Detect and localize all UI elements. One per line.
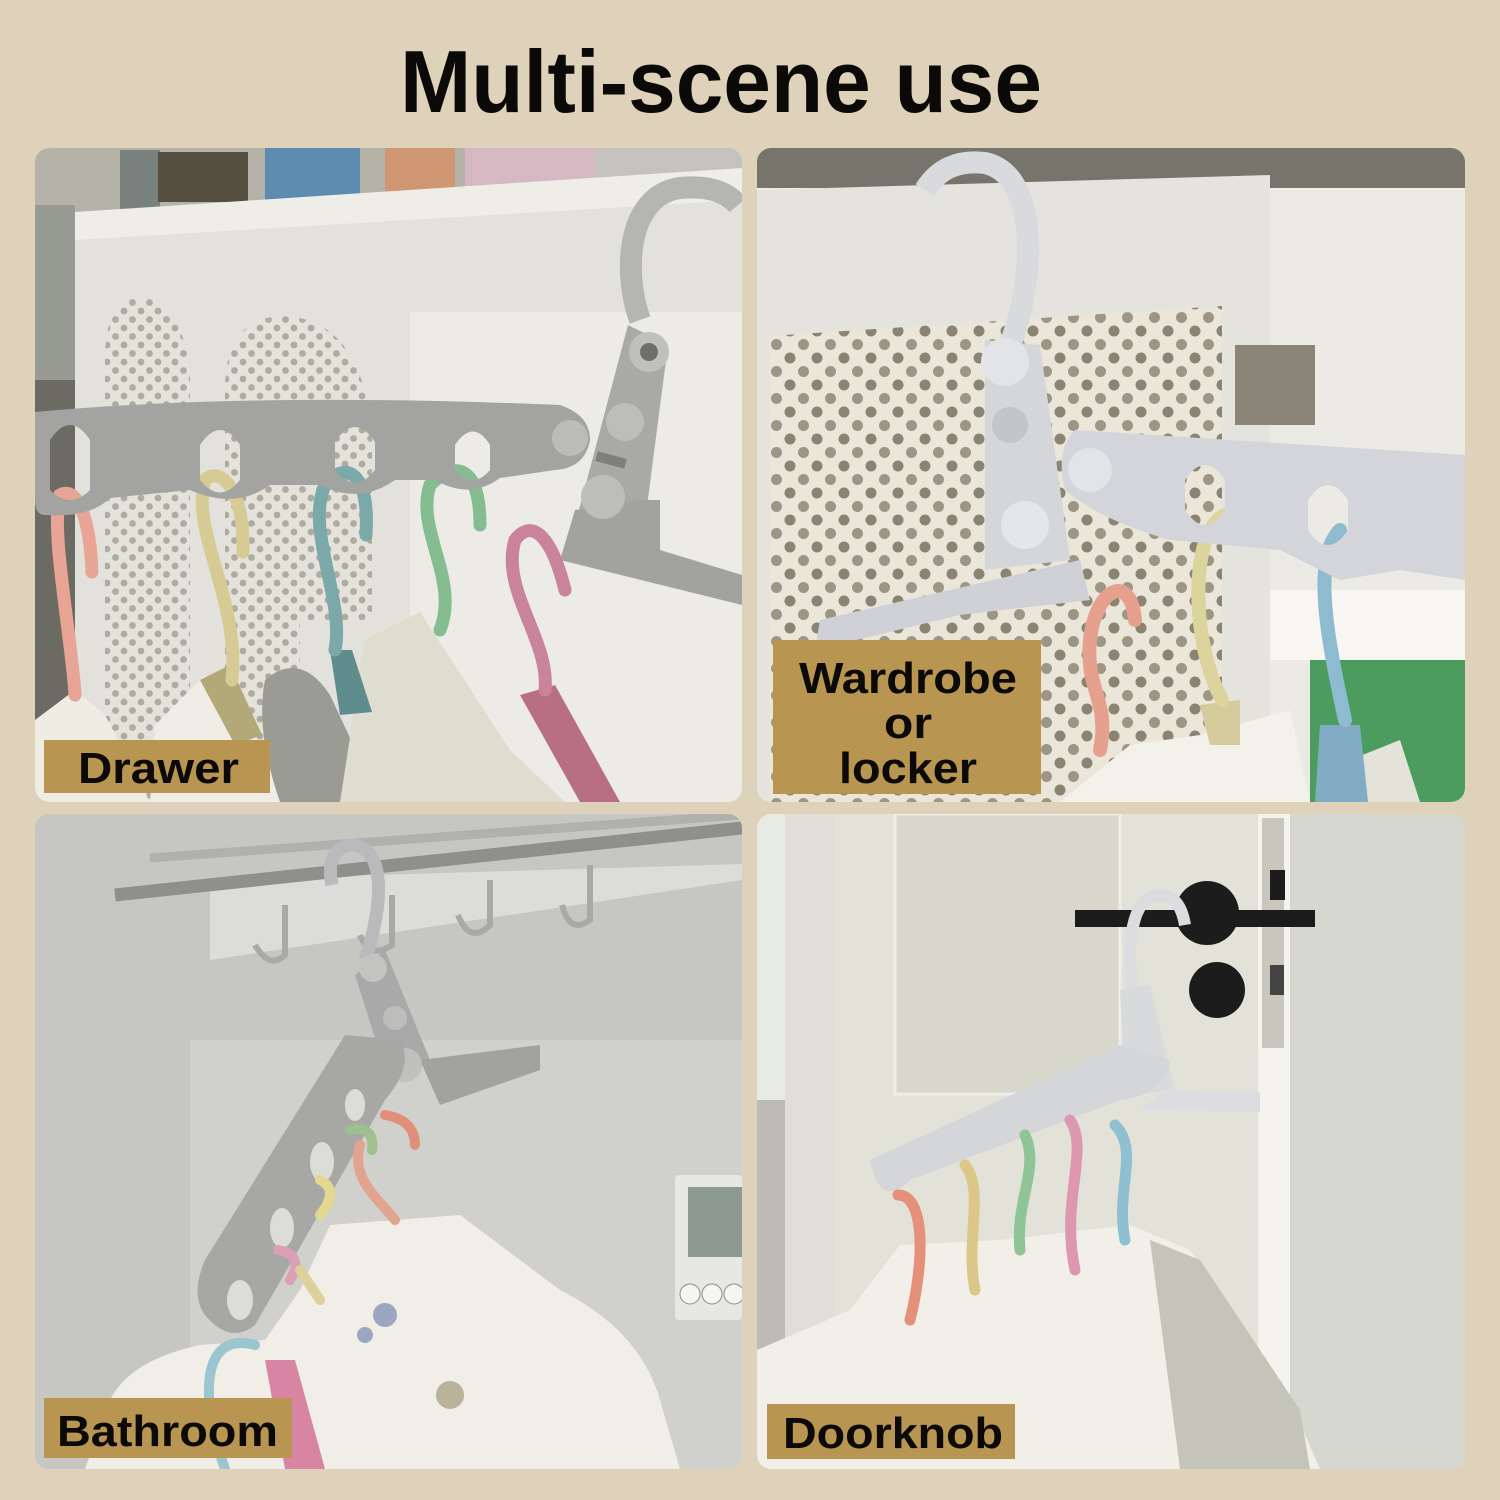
hook: grey hanger top bbox=[631, 187, 738, 320]
title: Multi-scene use bbox=[400, 32, 1042, 131]
towel rail bbox=[115, 815, 742, 961]
small hangers bbox=[1089, 515, 1345, 750]
panel: doorknob bbox=[757, 814, 1465, 1469]
shelf background bbox=[35, 148, 742, 802]
hanger arm bbox=[815, 338, 1090, 650]
small hangers bbox=[898, 1120, 1127, 1320]
mesh panel bbox=[770, 306, 1222, 802]
clothes bbox=[1060, 700, 1420, 802]
label: wardrobe or locker: or bbox=[884, 699, 932, 748]
door lock bbox=[1075, 870, 1315, 1018]
shirt bbox=[85, 1215, 680, 1469]
small hangers bbox=[209, 1115, 415, 1469]
hook and arm bbox=[330, 845, 379, 960]
clothes bbox=[757, 1225, 1320, 1469]
hanger bar bbox=[35, 400, 590, 515]
label: bathroom bbox=[44, 1398, 292, 1458]
panel: wardrobe bbox=[757, 148, 1465, 802]
clothes bbox=[35, 612, 620, 802]
label: wardrobe or locker bbox=[773, 640, 1041, 794]
hanger bar bbox=[1062, 430, 1465, 580]
label: wardrobe or locker: locker bbox=[839, 744, 977, 793]
hanger bar bbox=[198, 1035, 405, 1333]
room and door bbox=[757, 814, 1290, 1395]
label: drawer bbox=[44, 740, 270, 793]
hanger folding arm bbox=[560, 325, 742, 605]
hook bbox=[925, 162, 1028, 345]
label: bathroom: Bathroom bbox=[57, 1407, 278, 1456]
panel: bathroom bbox=[35, 814, 744, 1469]
hook and arm bbox=[1130, 895, 1185, 1000]
panel: drawer bbox=[35, 148, 742, 802]
cabinet bbox=[444, 202, 742, 218]
label: wardrobe or locker: Wardrobe bbox=[799, 654, 1017, 703]
cupboard background bbox=[757, 148, 1465, 802]
label: drawer: Drawer bbox=[78, 744, 239, 793]
small hangers bbox=[57, 471, 565, 695]
thermostat bbox=[675, 1175, 744, 1320]
label: doorknob: Doorknob bbox=[783, 1409, 1003, 1458]
